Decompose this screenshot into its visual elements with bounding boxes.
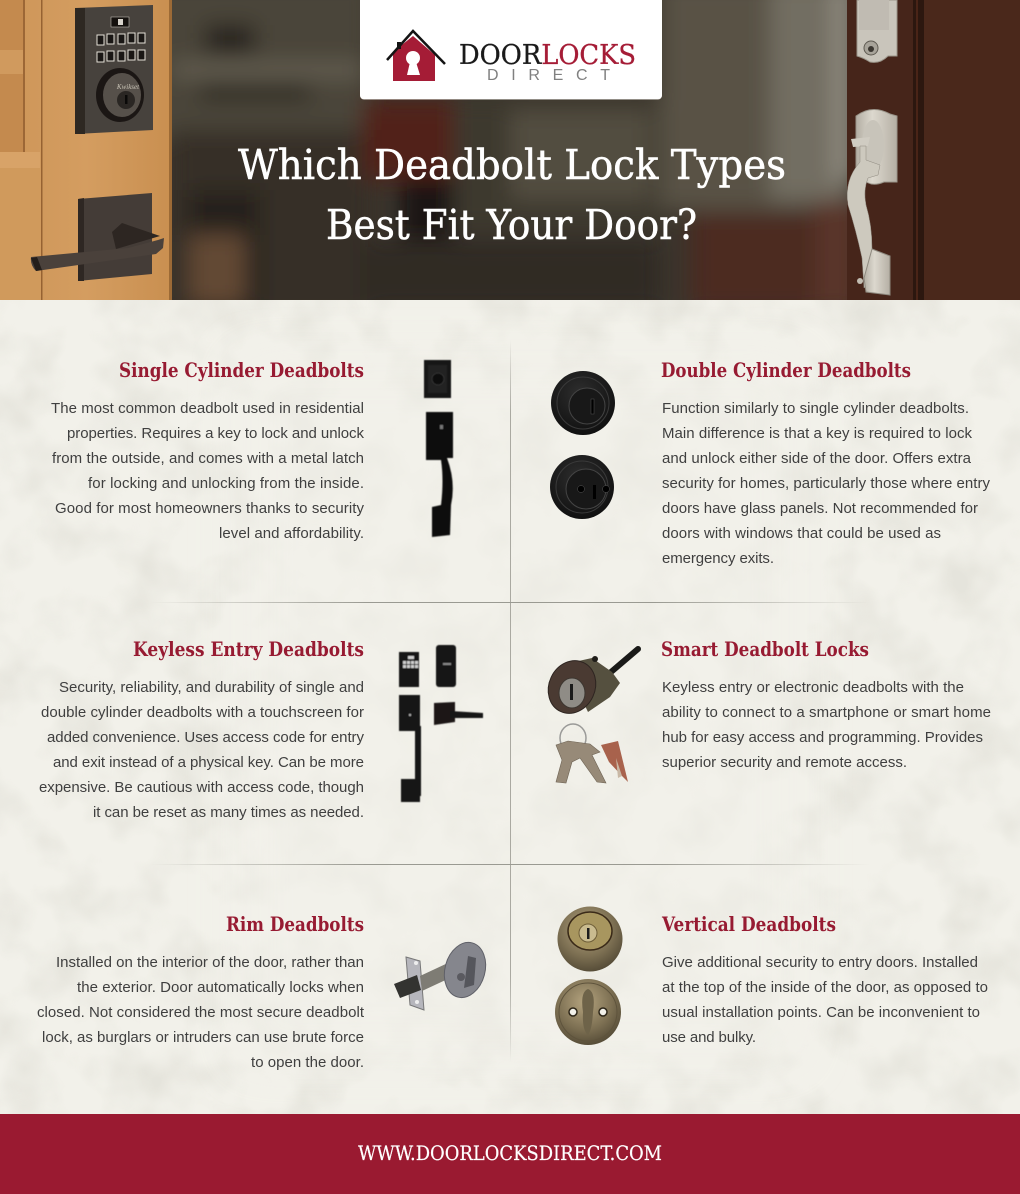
panel: rim deadbolts: Rim Deadbolts [226,912,364,936]
panel: double cylinder deadbolts: and unlock either side of the door. Offers extra [662,450,972,467]
panel: keyless entry deadbolts: expensive. Be cautious with access code, though [39,779,364,796]
header photo [172,0,847,300]
panel: double cylinder deadbolts [661,358,990,567]
panel: single cylinder deadbolts: for locking and unlocking from the inside. [88,475,364,492]
panel: smart deadbolt locks: Keyless entry or electronic deadbolts with the [662,679,964,696]
panel: vertical deadbolts: use and bulky. [662,1029,756,1046]
panel: vertical deadbolts: Give additional security to entry doors. Installed [662,954,978,971]
handle [847,109,897,295]
lever [31,193,164,281]
panel: smart deadbolt locks: hub for easy access and programming. Provides [662,729,983,746]
panel: single cylinder deadbolts: Single Cylinder Deadbolts [119,358,364,382]
keypad plate: Kwikset [116,83,140,91]
upper lock [857,0,897,62]
logo house icon [387,31,445,81]
panel: rim deadbolts [37,912,365,1071]
panel: double cylinder deadbolts: emergency exits. [662,550,774,567]
icon: keyless entry lock set [399,645,483,802]
panel: double cylinder deadbolts: security for homes, particularly those where entry [662,475,990,492]
title: Which Deadbolt Lock Types [238,141,786,189]
logo card [360,0,662,100]
right door with nickel lock and handle [847,0,1020,300]
panel: keyless entry deadbolts: Security, reliability, and durability of single and [59,679,364,696]
panel: rim deadbolts: lock, as burglars or intruders can use brute force [42,1029,364,1046]
panel: vertical deadbolts: Vertical Deadbolts [661,912,836,936]
footer [0,1114,1020,1194]
keypad plate [75,5,153,134]
title [238,141,786,249]
panel: smart deadbolt locks: superior security and remote access. [662,754,907,771]
panel: single cylinder deadbolts: level and affordability. [219,525,364,542]
page background [0,300,1020,1114]
icon: smart lock cylinder and keys [540,649,638,783]
panel: smart deadbolt locks: Smart Deadbolt Locks [661,637,869,661]
panel: keyless entry deadbolts: it can be reset as many times as needed. [93,804,364,821]
panel: single cylinder deadbolts [51,358,364,542]
panel: keyless entry deadbolts: and exit instead of a physical key. Can be more [53,754,364,771]
panel: double cylinder deadbolts: Function similarly to single cylinder deadbolts. [662,400,969,417]
icon: rim deadbolt [394,938,492,1010]
panel: rim deadbolts: to open the door. [251,1054,364,1071]
icon: single cylinder handle set [424,360,453,537]
title: Best Fit Your Door? [326,201,697,249]
panel: keyless entry deadbolts: added convenience. Uses access code for entry [47,729,364,746]
footer: WWW.DOORLOCKSDIRECT.COM [358,1141,662,1165]
icon: vertical deadbolt pair [555,906,622,1045]
panel: single cylinder deadbolts: properties. Requires a key to lock and unlock [67,425,364,442]
panel: vertical deadbolts: usual installation points. Can be inconvenient to [662,1004,980,1021]
panel: double cylinder deadbolts: doors with windows that could be used as [662,525,941,542]
panel: rim deadbolts: Installed on the interior of the door, rather than [56,954,364,971]
panel: double cylinder deadbolts: doors have glass panels. Not recommended for [662,500,978,517]
panel: keyless entry deadbolts: double cylinder deadbolts with a touchscreen for [41,704,364,721]
blurred room [172,0,847,300]
panel: rim deadbolts: the exterior. Door automatically locks when [77,979,364,996]
panel: double cylinder deadbolts: Double Cylinder Deadbolts [661,358,911,382]
logo card: DIRECT [487,67,610,84]
panel: smart deadbolt locks: ability to connect to a smartphone or smart home [662,704,991,721]
panel: single cylinder deadbolts: from the outside, and comes with a metal latch [52,450,364,467]
panel: keyless entry deadbolts: Keyless Entry Deadbolts [133,637,364,661]
panel: smart deadbolt locks [661,637,991,771]
panel: rim deadbolts: closed. Not considered the most secure deadbolt [37,1004,365,1021]
panel: vertical deadbolts [661,912,988,1046]
left door with smart lock and lever [0,0,172,300]
panel: keyless entry deadbolts [39,637,364,821]
panel: vertical deadbolts: at the top of the inside of the door, as opposed to [662,979,988,996]
logo wordmark: DOORLOCKS [459,40,636,71]
panel: single cylinder deadbolts: Good for most homeowners thanks to security [55,500,364,517]
icon: double cylinder deadbolts [550,371,615,519]
panel: single cylinder deadbolts: The most common deadbolt used in residential [51,400,364,417]
panel: double cylinder deadbolts: Main difference is that a key is required to lock [662,425,972,442]
